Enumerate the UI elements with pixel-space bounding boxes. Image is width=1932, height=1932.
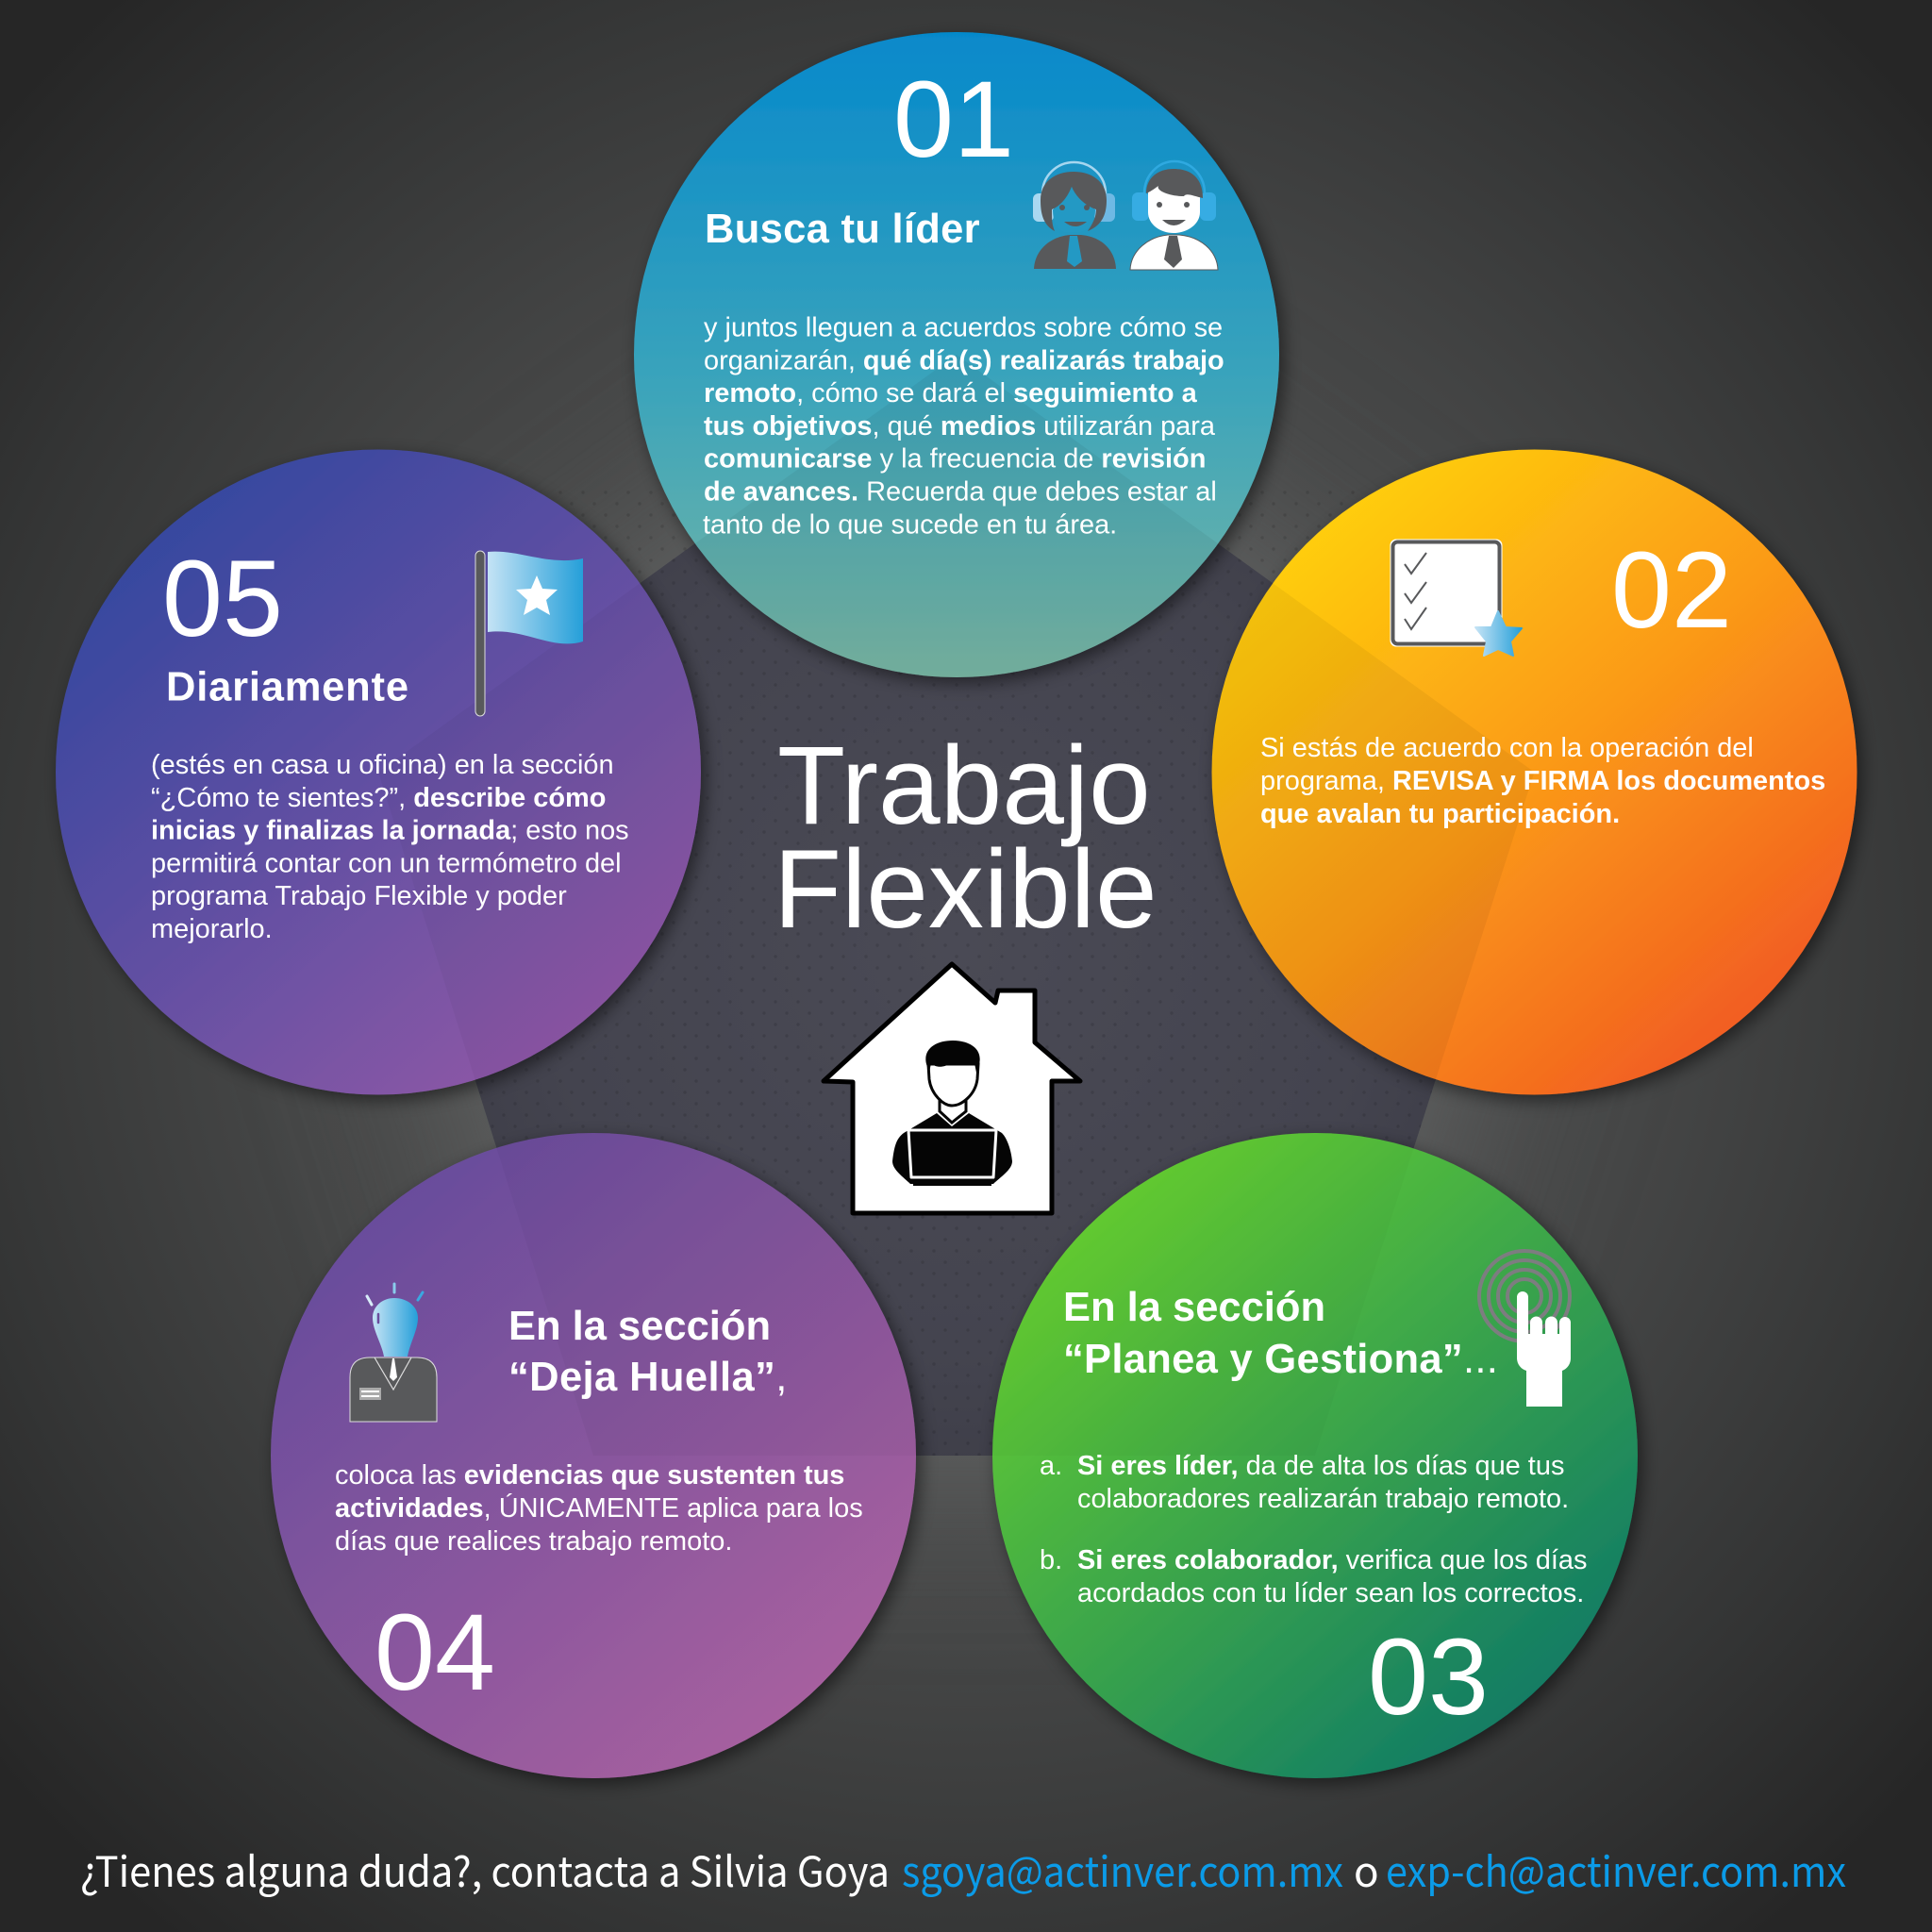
- body text: mejorarlo.: [151, 914, 273, 944]
- body text: y juntos lleguen a acuerdos sobre cómo se: [704, 313, 1223, 343]
- heading: En la sección Planea y Gestiona: En la sección: [1063, 1285, 1325, 1330]
- body text: [1260, 733, 1825, 829]
- body text: (estés en casa u oficina) en la sección: [151, 750, 614, 780]
- body text: [335, 1460, 863, 1557]
- body text: inicias y finalizas la jornada; esto nos: [151, 816, 629, 846]
- body text: Si eres líder, da de alta los días que tus: [1077, 1451, 1564, 1481]
- body text: días que realices trabajo remoto.: [335, 1526, 732, 1557]
- body text: programa Trabajo Flexible y poder: [151, 881, 567, 911]
- body text: acordados con tu líder sean los correctos.: [1077, 1578, 1584, 1608]
- number 04: 04: [375, 1592, 495, 1713]
- footer contact line: exp-ch@actinver.com.mx: [1386, 1839, 1846, 1899]
- icon: woman with headset: [1033, 162, 1116, 269]
- heading: En la sección Planea y Gestiona: [1063, 1285, 1498, 1382]
- footer contact line: [80, 1839, 1846, 1899]
- body text: tanto de lo que sucede en tu área.: [703, 509, 1117, 540]
- title: Trabajo: [777, 724, 1151, 848]
- icon: checklist with star: [1391, 540, 1522, 656]
- heading: En la sección Deja Huella: [508, 1304, 788, 1400]
- icon: hand tapping: [1479, 1251, 1571, 1407]
- icon: lightbulb head in suit: [350, 1284, 437, 1422]
- heading: Diariamente: Diariamente: [166, 664, 409, 709]
- body text: “¿Cómo te sientes?”, describe cómo: [151, 783, 606, 813]
- body text: Si estás de acuerdo con la operación del: [1260, 733, 1754, 763]
- body text: [1040, 1451, 1587, 1608]
- central pentagon: [378, 355, 1534, 1456]
- body text: a.: [1040, 1451, 1062, 1481]
- body text: coloca las evidencias que sustenten tus: [335, 1460, 844, 1491]
- icon: flag with star: [475, 551, 583, 716]
- panel: step 02: [1211, 449, 1857, 1094]
- body text: actividades, ÚNICAMENTE aplica para los: [335, 1492, 863, 1524]
- heading: En la sección Planea y Gestiona: “Planea y Gestiona”...: [1063, 1337, 1498, 1382]
- panel: step 01: [634, 32, 1279, 677]
- body text: programa, REVISA y FIRMA los documentos: [1260, 766, 1825, 796]
- body text: comunicarse y la frecuencia de revisión: [704, 444, 1206, 475]
- panel: step 04: [271, 1133, 916, 1778]
- body text: [703, 313, 1224, 540]
- body text: [151, 750, 629, 944]
- panel: step 03: [992, 1133, 1638, 1778]
- number 02: 02: [1611, 530, 1732, 651]
- heading: En la sección Deja Huella: “Deja Huella”,: [508, 1355, 788, 1400]
- heading: Busca tu líder: Busca tu líder: [705, 207, 980, 252]
- body text: de avances. Recuerda que debes estar al: [704, 477, 1217, 508]
- number 05: 05: [162, 539, 283, 659]
- number 01: 01: [893, 59, 1014, 180]
- number 03: 03: [1368, 1617, 1489, 1738]
- footer contact line: ¿Tienes alguna duda?, contacta a Silvia Goya: [80, 1839, 890, 1899]
- title: [774, 724, 1158, 952]
- icon: man with headset: [1130, 161, 1218, 270]
- heading: En la sección Deja Huella: En la sección: [508, 1304, 771, 1349]
- body text: Si eres colaborador, verifica que los días: [1077, 1545, 1587, 1575]
- body text: remoto, cómo se dará el seguimiento a: [704, 378, 1198, 408]
- body text: organizarán, qué día(s) realizarás trabajo: [704, 345, 1224, 375]
- body text: que avalan tu participación.: [1260, 799, 1620, 829]
- body text: tus objetivos, qué medios utilizarán para: [704, 411, 1216, 441]
- footer contact line: sgoya@actinver.com.mx: [902, 1839, 1343, 1899]
- icon: house with person at laptop: [824, 964, 1080, 1213]
- body text: colaboradores realizarán trabajo remoto.: [1077, 1484, 1569, 1514]
- footer contact line: o: [1354, 1839, 1379, 1899]
- body text: permitirá contar con un termómetro del: [151, 848, 622, 878]
- panel: step 05: [56, 449, 701, 1094]
- body text: b.: [1040, 1545, 1062, 1575]
- title: Flexible: [774, 827, 1158, 952]
